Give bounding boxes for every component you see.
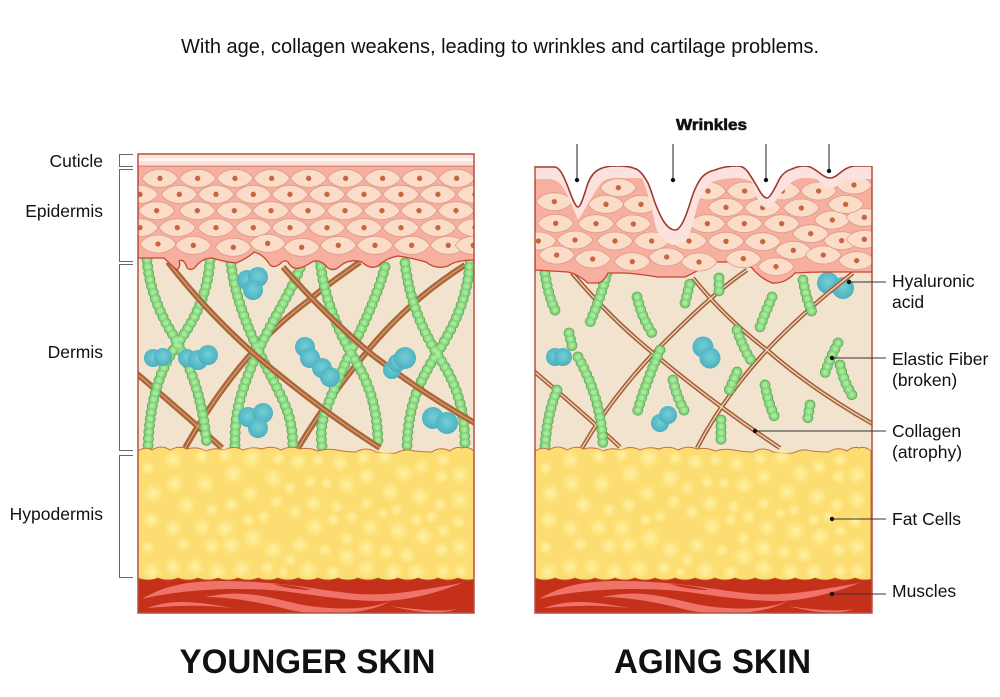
left brackets [120,154,133,578]
aging dermis background [535,250,872,455]
right labels: Hyaluronic [892,271,975,291]
left labels: Hypodermis [10,504,103,524]
aging collagen (atrophy) [530,270,880,448]
white area above wrinkled surface [536,166,850,230]
younger collagen back strands [130,262,465,448]
aging broken elastic fibers [545,273,852,447]
younger collagen front strands [168,262,480,448]
panel: younger skin [122,154,493,613]
surface outline [535,166,872,230]
right labels: Muscles [892,581,956,601]
younger epidermis [138,166,474,270]
younger hyaluronic acid clusters [144,267,458,438]
dermis background [138,250,474,455]
aging epidermis [535,166,872,283]
younger fat layer [138,446,474,584]
younger muscle layer [138,578,478,613]
right labels: Collagen [892,421,961,441]
aging panel border [535,166,872,613]
heading: aging skin: AGING SKIN [614,643,811,681]
right labels: acid [892,292,924,312]
right labels: (atrophy) [892,442,962,462]
left labels [10,151,103,524]
panel: aging skin [520,160,882,613]
right labels: Elastic Fiber [892,349,988,369]
aging fat layer [535,446,871,584]
aging muscle layer [535,578,875,613]
aging cuticle band [535,166,872,245]
right labels [892,271,988,601]
wrinkle pointers [575,144,831,182]
younger epidermal cells [122,169,493,256]
heading: younger skin: YOUNGER SKIN [180,643,436,681]
left labels: Epidermis [25,201,103,221]
younger elastic fibers [147,260,470,447]
left labels: Cuticle [50,151,103,171]
aging epidermal cells [520,176,882,276]
younger panel border [138,154,474,613]
younger cuticle [138,154,474,166]
right leader lines [753,280,886,596]
right labels: Fat Cells [892,509,961,529]
right labels: (broken) [892,370,957,390]
title: With age, collagen weakens, leading to wrinkles and cartilage problems. [181,36,819,58]
wrinkles heading: Wrinkles [676,117,747,134]
left labels: Dermis [48,342,103,362]
aging hyaluronic acid clusters [546,272,854,432]
